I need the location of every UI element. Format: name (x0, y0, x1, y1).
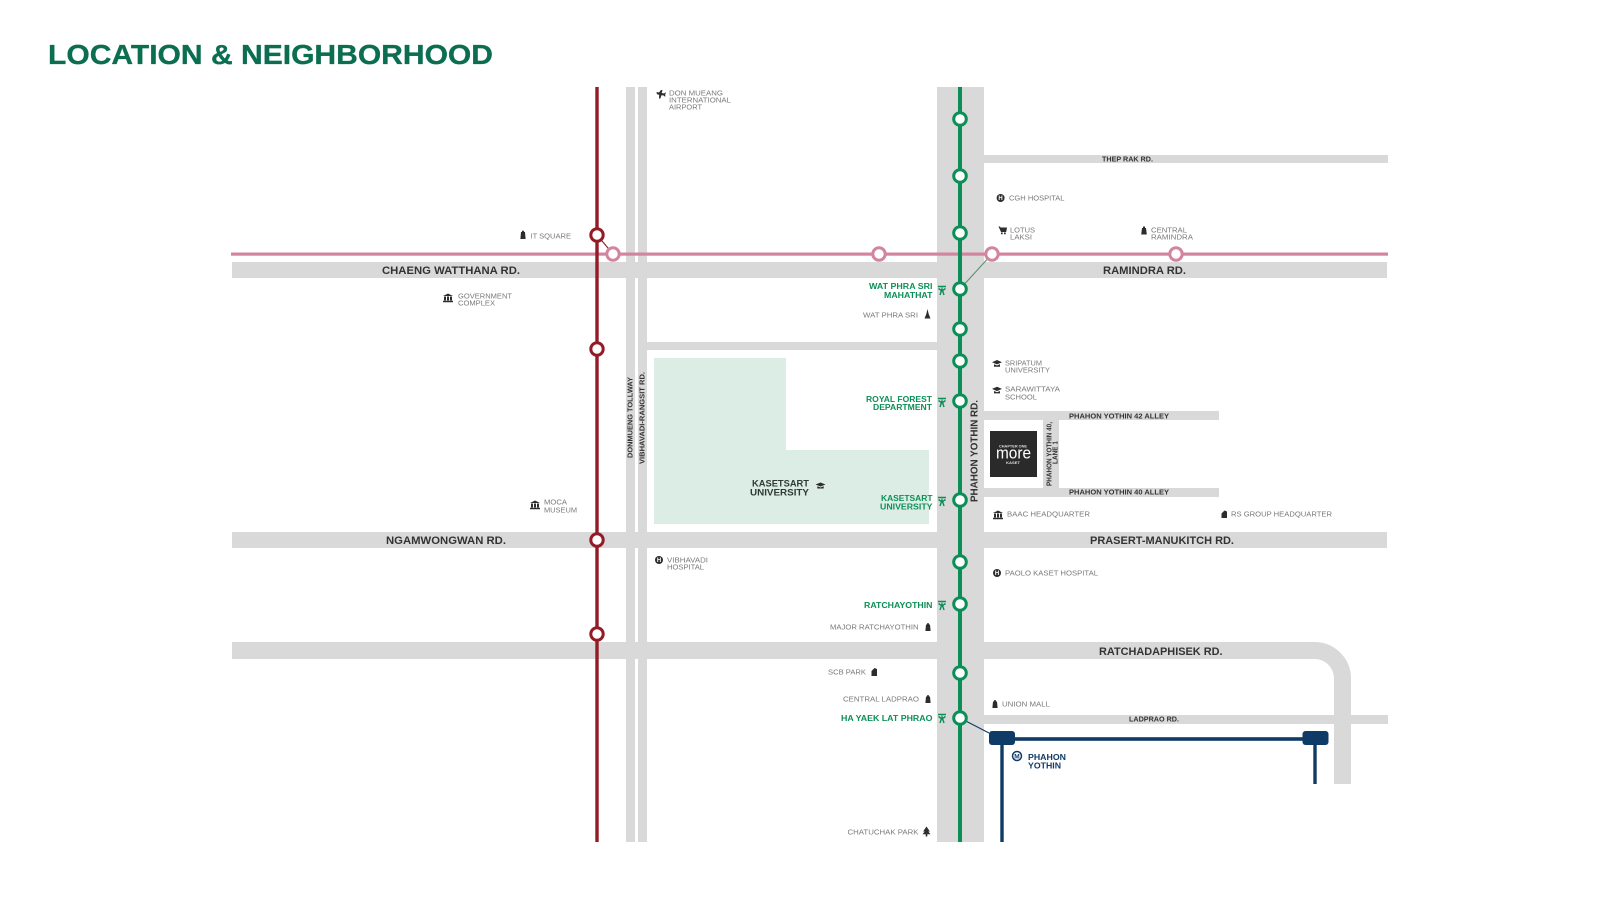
POI: Vibhavadi Hospital: HOSPITAL (667, 563, 704, 572)
POI: Government Complex: COMPLEX (458, 299, 495, 308)
POI: Lotus Laksi: LAKSI (1010, 233, 1032, 242)
POI: Central Ramindra: RAMINDRA (1151, 233, 1194, 242)
project logo: Chapter One More Kaset: more (996, 444, 1031, 462)
POI: Major Ratchayothin: MAJOR RATCHAYOTHIN (830, 623, 918, 632)
blue rail line (960, 718, 1328, 842)
POI: Chatuchak Park: CHATUCHAK PARK (848, 828, 918, 837)
POI: Government Complex: GOVERNMENT (458, 292, 512, 301)
station: Kasetsart University (880, 493, 946, 512)
Kasetsart University campus area (654, 358, 929, 524)
POI: Vibhavadi Hospital: VIBHAVADI (667, 556, 708, 565)
project logo: Chapter One More Kaset (990, 431, 1037, 477)
station: Kasetsart University: UNIVERSITY (880, 502, 933, 512)
road labels: DONMUENG TOLLWAY (626, 377, 635, 458)
POI: IT Square: IT SQUARE (530, 232, 571, 241)
POI: Sarawittaya School (992, 385, 1061, 402)
green rail line (958, 87, 962, 842)
POI: Central Ramindra: CENTRAL (1151, 226, 1187, 235)
road labels: PHAHON YOTHIN 40, (1046, 422, 1054, 486)
POI: MOCA Museum: MUSEUM (544, 506, 577, 515)
POI: Sarawittaya School: SCHOOL (1005, 393, 1037, 402)
POI: MOCA Museum: MOCA (544, 498, 568, 507)
station: Kasetsart University: KASETSART (881, 493, 933, 503)
POI: MOCA Museum (530, 498, 577, 515)
station: Phahon Yothin MRT (1012, 752, 1066, 770)
station: Wat Phra Sri Mahathat: WAT PHRA SRI (869, 281, 932, 291)
POI: BAAC Headquarter: BAAC HEADQUARTER (1007, 510, 1091, 519)
title: LOCATION & NEIGHBORHOOD (48, 39, 493, 70)
POI: Sripatum University: UNIVERSITY (1005, 366, 1050, 375)
POI: Don Mueang International Airport: AIRPORT (669, 103, 702, 112)
red rail line (595, 87, 613, 842)
road labels: THEP RAK RD. (1102, 155, 1153, 164)
road labels: PHAHON YOTHIN RD. (970, 400, 980, 502)
road labels (382, 155, 1234, 724)
road labels: VIBHAVADI-RANGSIT RD. (638, 372, 647, 464)
station: Royal Forest Department: ROYAL FOREST (866, 394, 933, 404)
campus label: Kasetsart University: UNIVERSITY (750, 487, 810, 497)
station: Royal Forest Department: DEPARTMENT (873, 402, 933, 412)
POI: Lotus Laksi: LOTUS (1010, 226, 1035, 235)
POI: CGH Hospital: CGH HOSPITAL (1009, 194, 1064, 203)
POI: Central Ramindra (1141, 226, 1194, 242)
road labels: CHAENG WATTHANA RD. (382, 265, 520, 277)
POI: Sarawittaya School: SARAWITTAYA (1005, 385, 1061, 394)
road labels: LANE 1 (1053, 441, 1060, 464)
station: Ha Yaek Lat Phrao: HA YAEK LAT PHRAO (841, 713, 933, 723)
green stations (954, 113, 966, 724)
pink stations (607, 248, 1182, 260)
POI: Sripatum University (992, 359, 1050, 375)
campus label: Kasetsart University (750, 478, 826, 497)
road labels: RATCHADAPHISEK RD. (1099, 646, 1222, 658)
POI: RS Group Headquarter: RS GROUP HEADQUARTER (1231, 510, 1333, 519)
POI: Government Complex (443, 292, 512, 308)
POI: Vibhavadi Hospital (655, 556, 708, 572)
POI: Union Mall: UNION MALL (1002, 700, 1050, 709)
POI: Lotus Laksi (998, 226, 1035, 242)
station: Phahon Yothin MRT: PHAHON (1028, 752, 1066, 762)
station: Phahon Yothin MRT: YOTHIN (1028, 760, 1061, 770)
POI: Don Mueang International Airport (656, 89, 731, 112)
road labels: LADPRAO RD. (1129, 715, 1179, 724)
station: Wat Phra Sri Mahathat (869, 281, 946, 300)
pink rail line (231, 252, 1388, 289)
POI: CGH Hospital: H (998, 196, 1003, 202)
POI: Central Ladprao: CENTRAL LADPRAO (843, 695, 919, 704)
road labels: PHAHON YOTHIN 42 ALLEY (1069, 412, 1169, 421)
POI: SCB Park: SCB PARK (828, 668, 866, 677)
road network (232, 87, 1388, 842)
POI: Paolo Kaset Hospital: PAOLO KASET HOSPITAL (1005, 569, 1098, 578)
road labels: RAMINDRA RD. (1103, 265, 1186, 277)
station: Phahon Yothin MRT: M (1014, 753, 1020, 760)
station: Wat Phra Sri Mahathat: MAHATHAT (884, 290, 933, 300)
POI: Sripatum University: SRIPATUM (1005, 359, 1042, 368)
POI: Vibhavadi Hospital: H (657, 558, 661, 564)
road labels: PHAHON YOTHIN 40 ALLEY (1069, 488, 1169, 497)
station: Ratchayothin: RATCHAYOTHIN (864, 600, 932, 610)
campus label: Kasetsart University: KASETSART (752, 478, 809, 488)
POI: Paolo Kaset Hospital: H (995, 571, 999, 577)
red stations (591, 229, 603, 640)
project logo: Chapter One More Kaset: KASET (1006, 461, 1021, 465)
POI: Don Mueang International Airport: INTERNATIONAL (669, 96, 731, 105)
POI: Wat Phra Sri: WAT PHRA SRI (863, 311, 918, 320)
road labels: NGAMWONGWAN RD. (386, 535, 506, 547)
POI: Wat Phra Sri (863, 309, 930, 320)
road labels: PRASERT-MANUKITCH RD. (1090, 535, 1234, 547)
station: Royal Forest Department (866, 394, 946, 412)
POI: Don Mueang International Airport: DON MUEANG (669, 89, 723, 98)
project logo: Chapter One More Kaset: CHAPTER ONE (999, 444, 1027, 448)
